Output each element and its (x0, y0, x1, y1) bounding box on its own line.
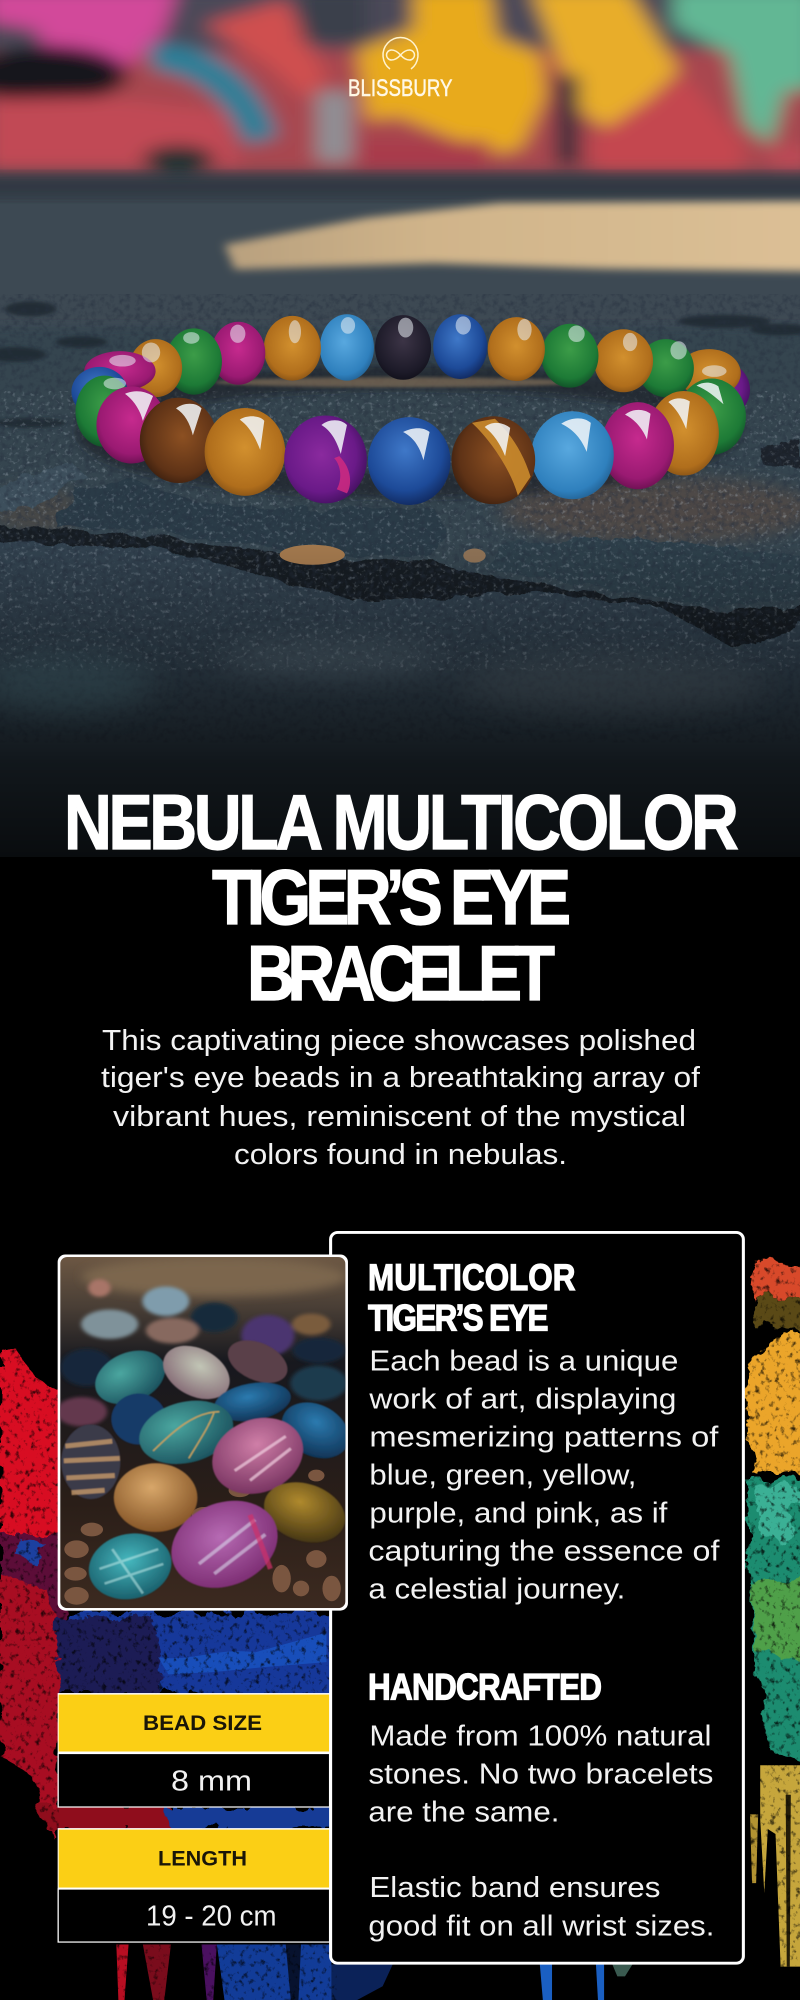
front beads (96, 379, 746, 505)
back beads (71, 314, 750, 447)
intro paragraph: tiger's eye beads in a breathtaking array of (101, 1062, 701, 1094)
paint splash: left (0, 1348, 337, 1839)
card section: handcrafted (368, 1667, 714, 1942)
body text: Elastic band ensures (369, 1872, 660, 1904)
cracked stones (0, 439, 800, 648)
body text: are the same. (368, 1796, 559, 1828)
back bead highlights (104, 316, 727, 389)
pebble (280, 545, 345, 565)
pavement near (0, 340, 800, 380)
spec labels: 8 mm (171, 1766, 252, 1798)
body text: mesmerizing patterns of (369, 1422, 719, 1454)
logo: Blissbury (348, 37, 452, 102)
heading: TIGER’S EYE (368, 1298, 549, 1339)
body text: purple, and pink, as if (369, 1498, 668, 1530)
hero photo: bracelet on pavement with graffiti wall (0, 0, 800, 857)
spec labels: BEAD SIZE (143, 1712, 262, 1735)
pebbles (64, 1470, 341, 1605)
paint texture (0, 1230, 800, 2000)
icon: infinity ring (383, 37, 418, 69)
spec table (58, 1693, 330, 1942)
intro paragraph: This captivating piece showcases polished (102, 1025, 696, 1057)
body text (368, 1720, 714, 1942)
paint drips: bottom (116, 1945, 633, 2000)
title: BRACELET (247, 930, 555, 1017)
spec labels: LENGTH (158, 1848, 247, 1870)
photo: polished tiger's eye stones (56, 1255, 360, 1611)
near stones (60, 1340, 346, 1600)
body text: capturing the essence of (368, 1536, 720, 1568)
sand strip (224, 201, 800, 272)
title: TIGER’S EYE (212, 854, 571, 941)
heading: MULTICOLOR (368, 1258, 576, 1299)
bead size label (58, 1693, 330, 1753)
intro paragraph: vibrant hues, reminiscent of the mystical (113, 1101, 686, 1133)
bead size value box (58, 1753, 330, 1807)
far stones (56, 1279, 347, 1426)
bracelet (71, 314, 750, 505)
spec labels: 19 - 20 cm (146, 1900, 276, 1932)
title (64, 779, 739, 1017)
body text: good fit on all wrist sizes. (368, 1910, 714, 1942)
body text: work of art, displaying (368, 1384, 676, 1416)
card section: multicolor tiger's eye (368, 1258, 720, 1606)
wordmark: BLISSBURY (348, 75, 452, 102)
length label (58, 1828, 330, 1889)
far cracks (0, 301, 800, 428)
lower section (0, 1231, 800, 2000)
pavement far (0, 185, 800, 334)
length value box (58, 1889, 330, 1942)
body text: stones. No two bracelets (368, 1758, 713, 1790)
title: NEBULA MULTICOLOR (64, 779, 739, 866)
paint splash: right (745, 1264, 800, 1765)
intro paragraph: colors found in nebulas. (234, 1139, 567, 1171)
fade to black (0, 539, 800, 857)
graffiti wall (0, 0, 800, 174)
body text: a celestial journey. (368, 1574, 625, 1606)
paint drips: right (750, 1765, 800, 1967)
body text (368, 1346, 720, 1606)
body text: Each bead is a unique (369, 1346, 678, 1378)
body text: blue, green, yellow, (369, 1460, 636, 1492)
front bead highlights (125, 383, 723, 460)
intro paragraph (101, 1025, 701, 1171)
heading: HANDCRAFTED (368, 1667, 602, 1708)
spec labels (143, 1712, 276, 1932)
body text: Made from 100% natural (369, 1720, 711, 1752)
heading (368, 1258, 576, 1339)
info card (331, 1232, 743, 1963)
